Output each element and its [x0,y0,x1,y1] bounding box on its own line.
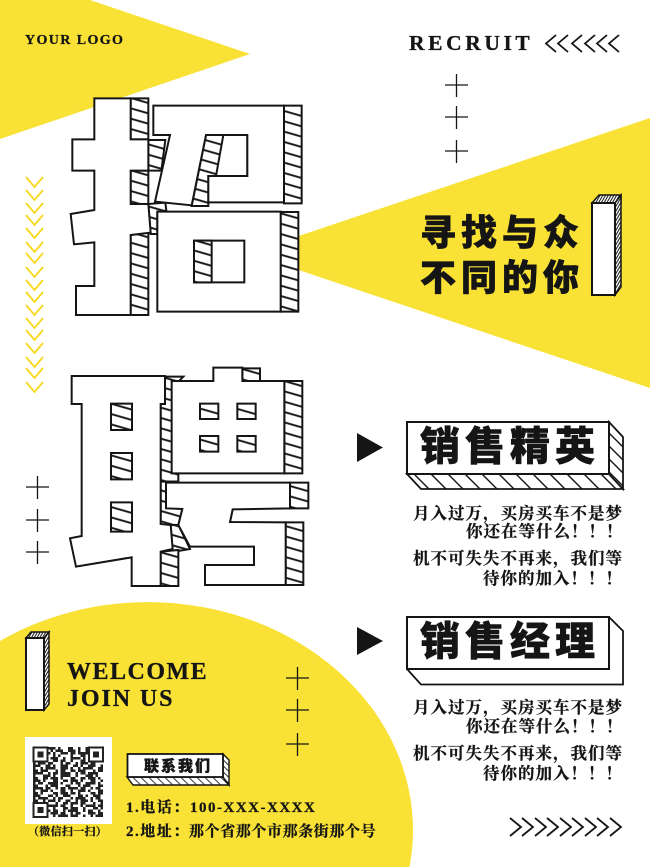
big outlined glyph: pin [70,368,308,586]
title box: sales elite [407,414,623,489]
title box: sales manager [407,609,623,684]
body text: sales manager: 月入过万，买房买车不是梦 [413,694,623,718]
contact details: 1.电话： [126,799,190,816]
icon: 3d bar left [26,632,49,710]
yellow triangle: right [248,118,650,388]
plus signs: top [445,74,468,163]
body text: sales manager: 待你的加入！！！ [483,760,623,784]
slogan: 不同的你 [420,249,584,301]
contact button [127,754,229,785]
icon: yellow down chevrons [26,177,43,392]
arrow: sales manager [357,627,383,655]
icon: 3d bar right [592,195,621,295]
recruit heading: RECRUIT [409,31,533,55]
body text: sales elite: 待你的加入！！！ [483,565,623,589]
welcome text: WELCOME [67,659,208,685]
contact details: 2.地址： [126,822,190,840]
body text: sales elite [413,500,624,589]
contact button: 联系我们 [144,755,212,776]
QR code [25,737,112,824]
welcome text: JOIN US [67,686,174,712]
title box: sales manager: 销售经理 [420,609,600,667]
contact details [126,799,376,841]
body text: sales elite: 你还在等什么！！！ [466,518,624,542]
title box: sales elite: 销售精英 [420,414,600,472]
plus signs: left [26,476,49,564]
contact details: 那个省那个市那条街那个号 [189,820,376,841]
welcome text [67,659,208,712]
arrow: sales elite [357,433,383,462]
plus signs: bottom [286,667,309,756]
icon: right chevrons [510,818,621,836]
icon: left chevrons [546,35,619,52]
body text: sales manager [413,694,624,784]
body text: sales elite: 机不可失失不再来，我们等 [413,545,623,569]
big outlined glyph: zhao [71,98,302,315]
slogan: 寻找与众 [420,204,584,256]
body text: sales elite: 月入过万，买房买车不是梦 [413,500,623,524]
logo text: YOUR LOGO [25,33,124,48]
QR caption: （微信扫一扫） [28,823,107,839]
slogan [420,204,584,301]
body text: sales manager: 机不可失失不再来，我们等 [413,740,623,764]
body text: sales manager: 你还在等什么！！！ [466,713,624,737]
yellow triangle: top left [0,0,250,139]
yellow ellipse: bottom left [0,602,413,867]
contact details: 100-XXX-XXXX [190,800,316,816]
